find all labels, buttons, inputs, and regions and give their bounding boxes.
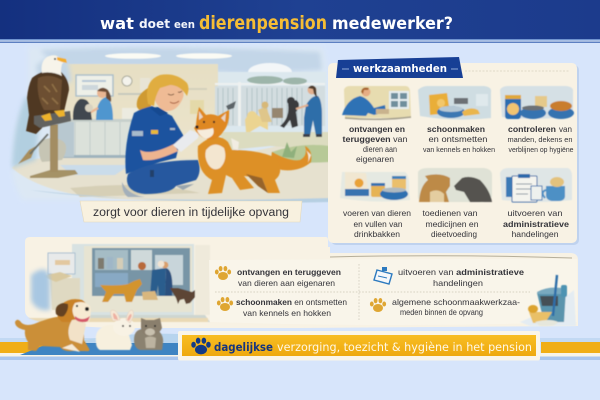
banner: dagelijkse verzorging	[178, 331, 540, 360]
item: ontvangen: van dieren aan eigenaren	[238, 279, 335, 288]
duty list box	[209, 259, 577, 325]
illustration: pension scene with caretaker and fox	[12, 47, 330, 203]
reception desk	[60, 120, 132, 157]
card: schoonmaken: van kennels en hokken	[423, 147, 495, 154]
panel: dagelijkse taken	[25, 237, 578, 328]
pets group	[15, 299, 163, 352]
card: uitvoeren: uitvoeren van	[508, 209, 563, 218]
card: voeren: en vullen van	[354, 220, 402, 229]
rabbit	[96, 310, 135, 350]
dogs in the run	[245, 114, 268, 132]
cat	[134, 318, 163, 350]
arm	[140, 144, 178, 160]
clock	[122, 76, 132, 86]
item: ontvangen	[215, 266, 341, 288]
card: ontvangen	[342, 86, 411, 164]
item: schoonmaken: schoonmaken en ontsmetten	[236, 298, 347, 307]
card: controleren: verblijnen op hygiëne	[508, 147, 574, 154]
card: controleren: van	[559, 125, 572, 134]
grass	[272, 145, 330, 163]
card: ontvangen: dieren aan	[363, 145, 397, 154]
item: algemene	[370, 297, 520, 317]
card: controleren: manden, dekens en	[508, 135, 572, 144]
caption ribbon	[80, 201, 302, 222]
card: schoonmaken: schoonmaken	[427, 125, 485, 134]
card: ontvangen: teruggeven van	[342, 135, 408, 144]
section tab: werkzaamheden	[353, 62, 447, 75]
notice board	[76, 75, 113, 96]
title: een	[174, 19, 195, 31]
kennels	[215, 86, 325, 126]
title: dierenpension	[199, 12, 327, 34]
card: ontvangen: eigenaren	[356, 155, 394, 164]
card: toedienen	[418, 168, 492, 239]
title: doet	[139, 16, 170, 31]
item: administratie: handelingen	[433, 278, 483, 288]
title: medewerker?	[332, 14, 453, 33]
caption ribbon: zorgt voor dieren in tijdelijke opvang	[93, 207, 289, 219]
card: toedienen: dieetvoeding	[431, 230, 477, 239]
item: schoonmaken	[217, 297, 347, 318]
shelves back	[122, 108, 138, 120]
eagle perch	[30, 170, 78, 178]
receptionist	[96, 97, 113, 120]
header banner	[0, 0, 600, 43]
greenery left	[12, 96, 40, 168]
card: uitvoeren	[500, 168, 572, 239]
card: voeren: voeren van dieren	[343, 209, 411, 218]
panel: werkzaamheden	[328, 57, 579, 245]
card: toedienen: toedienen van	[422, 209, 478, 218]
card: uitvoeren: handelingen	[512, 230, 558, 239]
title: wat	[100, 14, 134, 33]
card: toedienen: medicijnen en	[426, 220, 478, 229]
banner: dagelijkse verzorging: verzorging, toezicht & hygiène in het pension	[277, 340, 532, 354]
card: uitvoeren: administratieve	[503, 220, 569, 229]
torso	[125, 106, 186, 174]
title	[100, 12, 453, 34]
scene backdrop	[12, 47, 330, 203]
wall	[62, 64, 218, 159]
legs	[127, 160, 200, 194]
card: controleren	[500, 86, 574, 154]
card: controleren: controleren	[508, 125, 556, 134]
item: ontvangen: ontvangen en teruggeven	[237, 267, 341, 277]
caretaker	[122, 74, 200, 197]
bucket and broom	[39, 138, 66, 162]
hair	[147, 74, 188, 106]
floor	[12, 135, 330, 202]
card: ontvangen: ontvangen en	[349, 125, 405, 134]
eagle	[26, 55, 72, 134]
item: administratie: uitvoeren van administratieve	[398, 267, 524, 277]
left corner	[48, 253, 75, 274]
section tab	[336, 57, 463, 78]
item: schoonmaken: van kennels en hokken	[243, 309, 331, 318]
fox	[194, 107, 311, 194]
card: schoonmaken: en ontsmetten	[428, 135, 488, 144]
client and dog at desk	[73, 99, 92, 120]
card: voeren: drinkbakken	[354, 230, 400, 239]
ribbon stripes	[0, 334, 600, 360]
card: schoonmaken	[418, 86, 495, 154]
icon: cleaning bucket and mop	[520, 275, 576, 326]
card: voeren	[340, 172, 411, 239]
head	[152, 83, 184, 111]
icon: paw	[191, 338, 211, 354]
ponytail	[137, 88, 153, 111]
illustration: kennel interior	[28, 244, 210, 322]
banner: dagelijkse verzorging: dagelijkse	[214, 340, 273, 354]
dog	[15, 299, 91, 352]
item: administratie	[374, 267, 524, 288]
item: algemene: meden binnen de opvang	[400, 308, 483, 317]
item: algemene: algemene schoonmaakwerkzaa-	[392, 297, 520, 307]
worker right	[304, 96, 322, 136]
